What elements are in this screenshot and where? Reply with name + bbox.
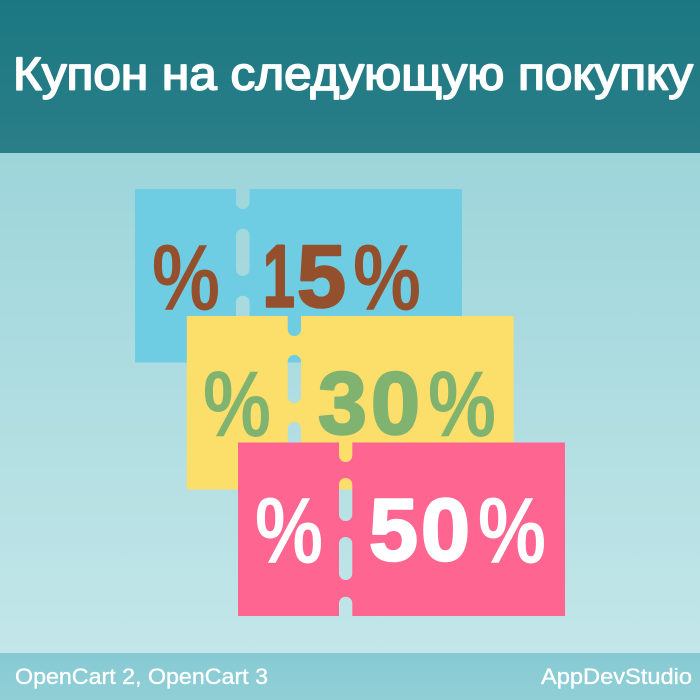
background panel — [0, 153, 700, 654]
discount value: 50 — [369, 480, 470, 579]
discount value — [318, 352, 496, 456]
coupon: 15% blue — [135, 189, 462, 362]
percent sign: % — [255, 478, 323, 583]
discount value: % — [478, 478, 546, 583]
footer right text: AppDevStudio — [541, 664, 692, 689]
title: Купон на следующую покупку — [13, 48, 693, 100]
discount value — [369, 478, 546, 583]
header band — [0, 0, 700, 153]
discount value: 30 — [318, 354, 420, 452]
discount value — [263, 225, 421, 330]
discount value: 1 — [263, 227, 295, 325]
coupon: 30% yellow — [187, 316, 514, 490]
percent sign: % — [152, 225, 220, 330]
discount value: % — [428, 352, 496, 456]
footer left text: OpenCart 2, OpenCart 3 — [15, 664, 268, 689]
discount value: % — [353, 225, 421, 330]
coupon: 50% pink — [238, 442, 565, 616]
discount value: 5 — [297, 226, 346, 326]
footer band — [0, 653, 700, 700]
percent sign: % — [203, 352, 271, 456]
